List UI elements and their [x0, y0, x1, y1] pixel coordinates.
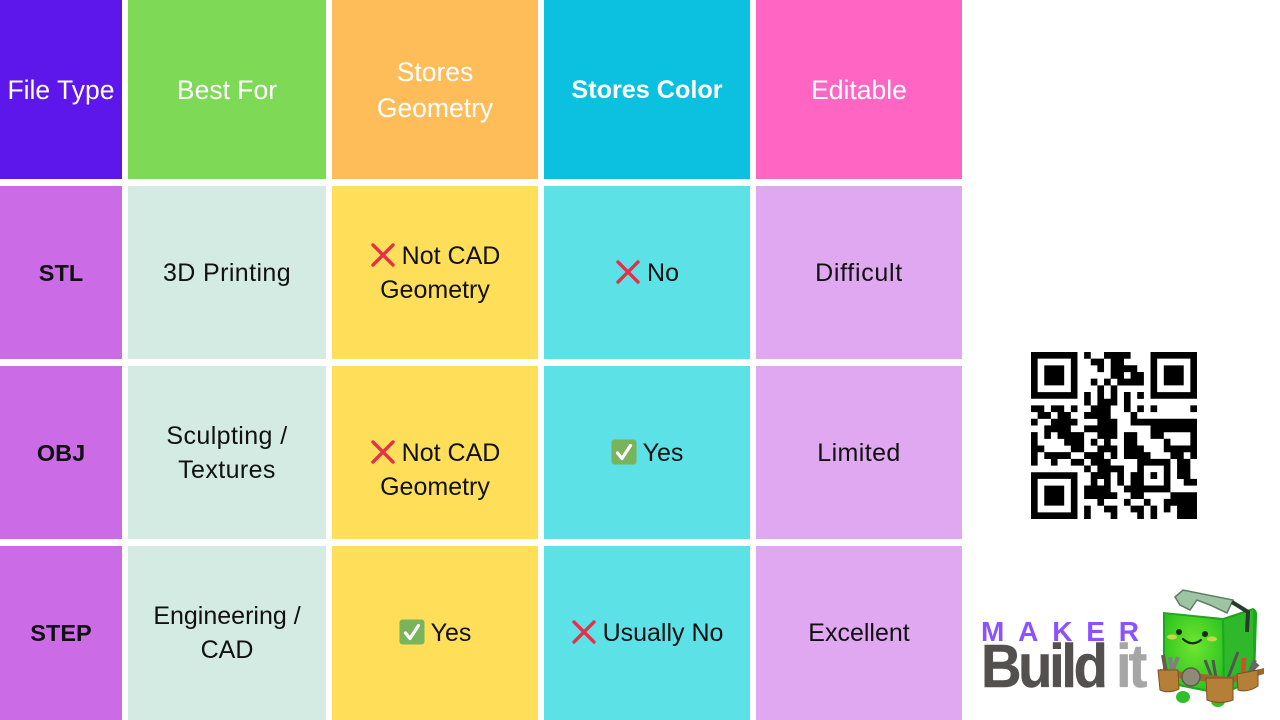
goggles [1175, 590, 1233, 613]
row STEP: stores geometry: Yes [431, 619, 471, 647]
row STL: editable: Difficult [815, 258, 903, 286]
row OBJ: stores geometry [332, 366, 538, 539]
gauge [1182, 668, 1200, 686]
tools [1163, 655, 1166, 672]
face [1176, 629, 1182, 635]
row STL: stores color: No [647, 258, 679, 286]
tool belt [1160, 668, 1264, 684]
header: File Type [0, 0, 122, 179]
logo word: it: it [1116, 633, 1147, 701]
row STL: file type: STL [39, 260, 83, 286]
row STL: best for: 3D Printing [163, 258, 291, 286]
row STEP: stores geometry [332, 546, 538, 720]
row STEP: stores color [544, 546, 750, 720]
header: Stores Geometry: Geometry [377, 92, 493, 122]
logo: Maker Build it [981, 589, 1264, 707]
row OBJ: stores color: Yes [643, 438, 683, 466]
header: Best For: Best For [177, 74, 277, 104]
row STEP: best for: CAD [201, 636, 253, 664]
logo word: Build: Build [981, 633, 1108, 701]
row STL: file type [0, 186, 122, 359]
row OBJ: file type: OBJ [37, 440, 85, 466]
header: Stores Geometry [332, 0, 538, 179]
row STEP: editable [756, 546, 962, 720]
row STEP: file type: STEP [30, 620, 92, 646]
row STEP: editable: Excellent [808, 619, 910, 647]
row STL: stores geometry: Not CAD [402, 242, 500, 270]
row OBJ: editable: Limited [817, 438, 901, 466]
row STEP: stores color: Usually No [603, 619, 723, 647]
row OBJ: stores geometry: Not CAD [402, 438, 500, 466]
row STL: editable [756, 186, 962, 359]
row OBJ: file type [0, 366, 122, 539]
row STL: best for [128, 186, 326, 359]
header: Editable: Editable [811, 74, 907, 104]
row OBJ: stores color [544, 366, 750, 539]
row STL: stores geometry: Geometry [380, 276, 490, 304]
header: Editable [756, 0, 962, 179]
header: Stores Geometry: Stores [397, 56, 473, 86]
row OBJ: best for [128, 366, 326, 539]
row OBJ: editable [756, 366, 962, 539]
row OBJ: best for: Sculpting / [166, 422, 288, 450]
row STL: stores geometry [332, 186, 538, 359]
row OBJ: best for: Textures [178, 456, 276, 484]
cube body [1163, 608, 1257, 695]
icon: green cube mascot [1158, 590, 1264, 707]
row STEP: best for [128, 546, 326, 720]
QR code [1031, 352, 1197, 519]
pouches [1158, 670, 1179, 692]
header: Best For [128, 0, 326, 179]
header: Stores Color: Stores Color [571, 76, 723, 104]
row STL: stores color [544, 186, 750, 359]
logo word: MAKER: MAKER [981, 616, 1139, 647]
row STEP: file type [0, 546, 122, 720]
header: File Type: File Type [7, 74, 115, 104]
header: Stores Color [544, 0, 750, 179]
row OBJ: stores geometry: Geometry [380, 472, 490, 500]
row STEP: best for: Engineering / [153, 602, 301, 630]
